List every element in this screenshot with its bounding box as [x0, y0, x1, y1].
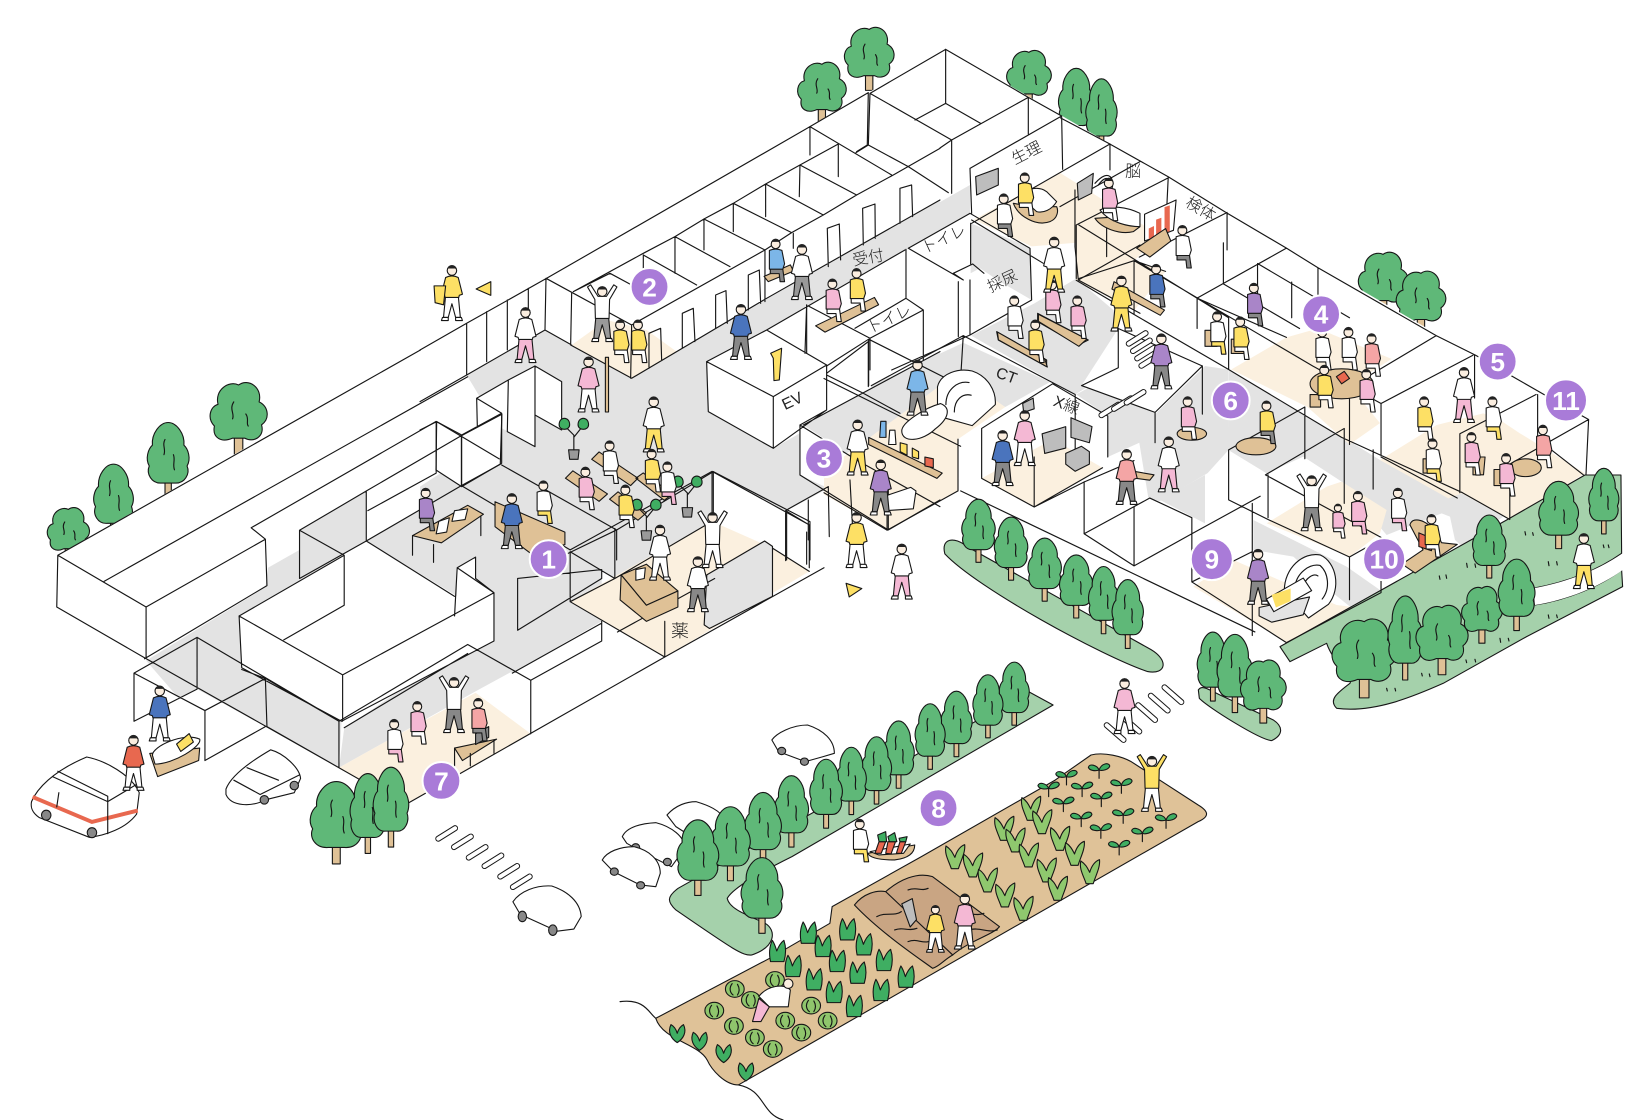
corridor 6 [1116, 333, 1275, 504]
light green plants [946, 796, 1100, 920]
visitors at entrance [434, 265, 912, 599]
badge 7 [423, 762, 460, 800]
building lines: clinic rooms row [420, 93, 940, 560]
badge 5 [1479, 343, 1517, 380]
room and equipment labels: 受付 [851, 246, 885, 269]
badge 6 [1212, 382, 1250, 419]
reception [419, 480, 552, 549]
furniture and equipment [150, 168, 1541, 777]
ambulance crew [123, 685, 193, 790]
parked cars by the tree row [602, 725, 834, 889]
room and equipment labels: 脳 [1125, 163, 1141, 181]
room and equipment labels: 生理 [1009, 138, 1045, 168]
people [123, 172, 1594, 1022]
heart leaf plants [670, 1025, 754, 1081]
field edge curves [620, 1001, 783, 1120]
room and equipment labels: X線 [1051, 392, 1082, 418]
urine room and exam rooms [997, 172, 1191, 363]
badge 1 [530, 540, 568, 578]
room and equipment labels: EV [780, 389, 806, 414]
parked car [226, 750, 301, 805]
field [620, 754, 1207, 1120]
island 2 trees [1197, 632, 1286, 723]
lower and front trees [310, 468, 1619, 933]
waiting area [579, 440, 676, 528]
pharmacy staff [650, 511, 727, 612]
cars and ambulance [31, 725, 834, 935]
cabbages [705, 972, 837, 1057]
room 2 [588, 239, 865, 363]
lobby benches and plants [559, 265, 1165, 540]
badge 5: 5 [1490, 347, 1505, 377]
badge 7: 7 [434, 766, 449, 796]
number badges [423, 268, 1587, 827]
badge 8: 8 [931, 794, 946, 824]
grey wedge beside room 9 [1160, 475, 1205, 523]
badge 3 [805, 439, 843, 477]
building lines: right wing [824, 118, 1589, 643]
badge 10 [1363, 538, 1405, 580]
island trees [962, 499, 1143, 648]
elevator arrow [771, 348, 782, 381]
room and equipment labels: 検体 [1183, 193, 1219, 225]
entrance arrow bottom [846, 583, 862, 597]
room and equipment labels: CT [994, 365, 1019, 388]
badge 10: 10 [1370, 545, 1399, 575]
crossings [438, 687, 1181, 887]
MRI scanner [1259, 555, 1336, 622]
sofa book [1419, 533, 1431, 551]
room 3 and CT [847, 360, 1035, 515]
badge 3: 3 [817, 444, 831, 474]
badge 1: 1 [541, 545, 556, 575]
badge 9 [1191, 538, 1233, 580]
carrot basket [868, 832, 915, 860]
beige room floors [339, 173, 1585, 805]
signs and arrows [476, 282, 862, 597]
badge 11 [1545, 379, 1587, 421]
badge 4: 4 [1314, 300, 1329, 330]
badge 2: 2 [642, 272, 657, 302]
room 4 [1211, 283, 1380, 412]
entrance arrow top [476, 282, 491, 295]
badge 8 [920, 789, 957, 827]
plowed plot [854, 875, 1000, 968]
white boxes and partitions [239, 328, 1229, 721]
building lines: top block [807, 49, 1140, 370]
trees at entrance 7 [310, 767, 409, 864]
building line work [57, 49, 1589, 805]
trees behind the building [47, 27, 1589, 809]
stairs [1101, 333, 1158, 415]
lawn trees [1332, 468, 1619, 698]
benches and desks, left half [150, 502, 678, 777]
room and equipment labels [671, 138, 1219, 641]
room and equipment labels: トイレ [919, 222, 969, 257]
room 7 [388, 676, 487, 762]
badge 9: 9 [1204, 545, 1219, 575]
building lines: left wing [57, 350, 824, 805]
farmers [753, 755, 1167, 1022]
tree row beside the field [677, 662, 1029, 933]
car at lower left [513, 886, 581, 935]
room 5 and 11 [1418, 367, 1552, 496]
grey floors: hall and corridors [146, 185, 1503, 768]
badge 6: 6 [1223, 386, 1238, 416]
CT scanner [902, 370, 995, 439]
room and equipment labels: トイレ [864, 302, 914, 337]
room and equipment labels: 薬 [671, 621, 689, 641]
badge 4 [1302, 295, 1340, 333]
sprouts [1038, 764, 1177, 855]
dark green plants [770, 919, 914, 1017]
room and equipment labels: 採尿 [985, 267, 1021, 296]
room 9, lawn walker and crossing [1114, 533, 1594, 734]
badge 2 [631, 268, 668, 306]
lawns [669, 475, 1623, 955]
room 10 [1297, 474, 1440, 557]
ambulance [31, 757, 139, 838]
badge 11: 11 [1552, 386, 1580, 416]
